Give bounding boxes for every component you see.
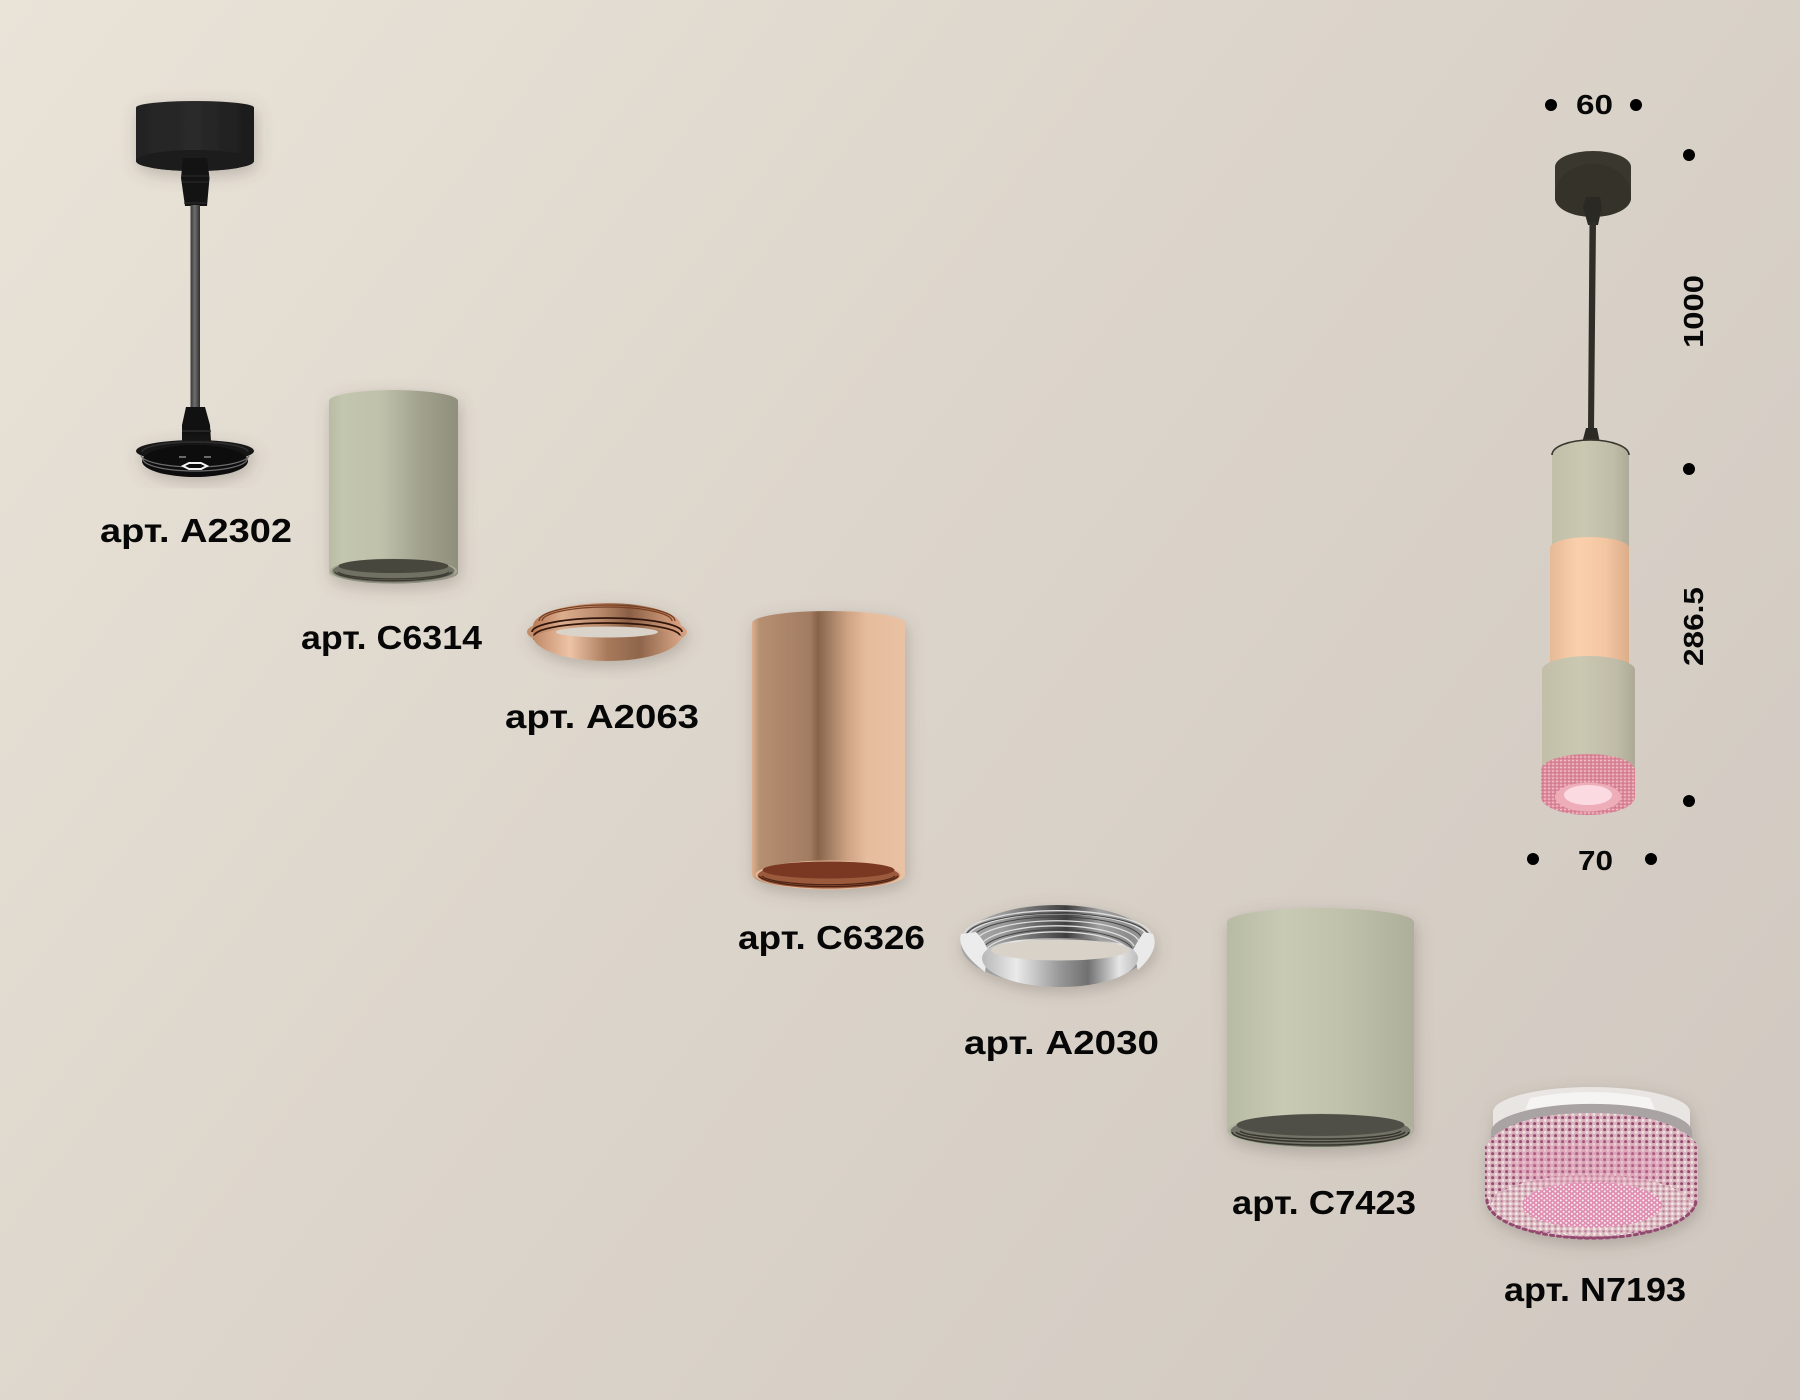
flange — [527, 615, 687, 649]
inner opening — [330, 558, 457, 584]
label: C6326: арт. C6326 — [738, 919, 925, 956]
dimension: width 60: 60 — [1576, 89, 1613, 120]
part: copper housing C6326 — [752, 611, 905, 890]
dimension: width 60 — [1545, 89, 1642, 120]
copper section — [1550, 537, 1629, 668]
flange — [960, 932, 988, 972]
part: sage housing C6314 — [329, 390, 458, 584]
label: C6314: арт. C6314 — [301, 619, 483, 656]
center lens — [1522, 1182, 1662, 1228]
dimension: height 1000 — [1678, 149, 1709, 475]
lower sage section — [1542, 656, 1635, 780]
stem — [190, 205, 200, 409]
mounting disc — [136, 440, 254, 477]
opening — [991, 940, 1129, 960]
dimension: width 70: 70 — [1578, 845, 1613, 876]
label: C7423: арт. C7423 — [1232, 1184, 1416, 1221]
lower pale zone — [1491, 1175, 1691, 1235]
threaded top — [961, 905, 1153, 985]
dimension: width 70 — [1527, 845, 1657, 876]
opening — [556, 626, 658, 638]
bottom rim beads — [1487, 1200, 1696, 1238]
part: suspension A2302 — [136, 101, 254, 477]
upper cord grip — [181, 158, 210, 206]
inner opening — [1228, 1114, 1414, 1148]
inner opening — [756, 860, 902, 890]
part: pink crystal N7193 — [1485, 1087, 1698, 1239]
pink crystal bezel — [1541, 754, 1635, 815]
inner wall — [982, 938, 1138, 987]
cord cap — [1582, 428, 1600, 443]
threaded back — [533, 603, 681, 640]
part: sage housing C7423 — [1227, 908, 1414, 1148]
inner wall — [533, 627, 681, 661]
crystal body — [1485, 1113, 1698, 1239]
dimension: height 1000: 1000 — [1678, 275, 1709, 348]
part: chrome ring A2030 — [960, 905, 1155, 987]
label: A2030: арт. A2030 — [964, 1024, 1159, 1061]
label: A2302: арт. A2302 — [100, 512, 292, 549]
assembled pendant lamp — [1541, 151, 1635, 815]
clear upper section — [1493, 1087, 1690, 1140]
label: N7193: арт. N7193 — [1504, 1271, 1686, 1308]
label: A2063: арт. A2063 — [505, 698, 699, 735]
dimension: height 286.5: 286.5 — [1678, 587, 1709, 666]
upper sage section — [1552, 440, 1629, 550]
lower cord grip — [182, 407, 211, 441]
cord grip — [1583, 197, 1602, 225]
ceiling canopy — [136, 101, 254, 171]
light opening — [1555, 782, 1621, 812]
canopy — [1555, 151, 1631, 217]
cord — [1588, 222, 1596, 430]
part: copper ring A2063 — [527, 603, 687, 661]
pink reflection band — [1509, 1141, 1673, 1189]
dimension: height 286.5 — [1678, 587, 1709, 807]
